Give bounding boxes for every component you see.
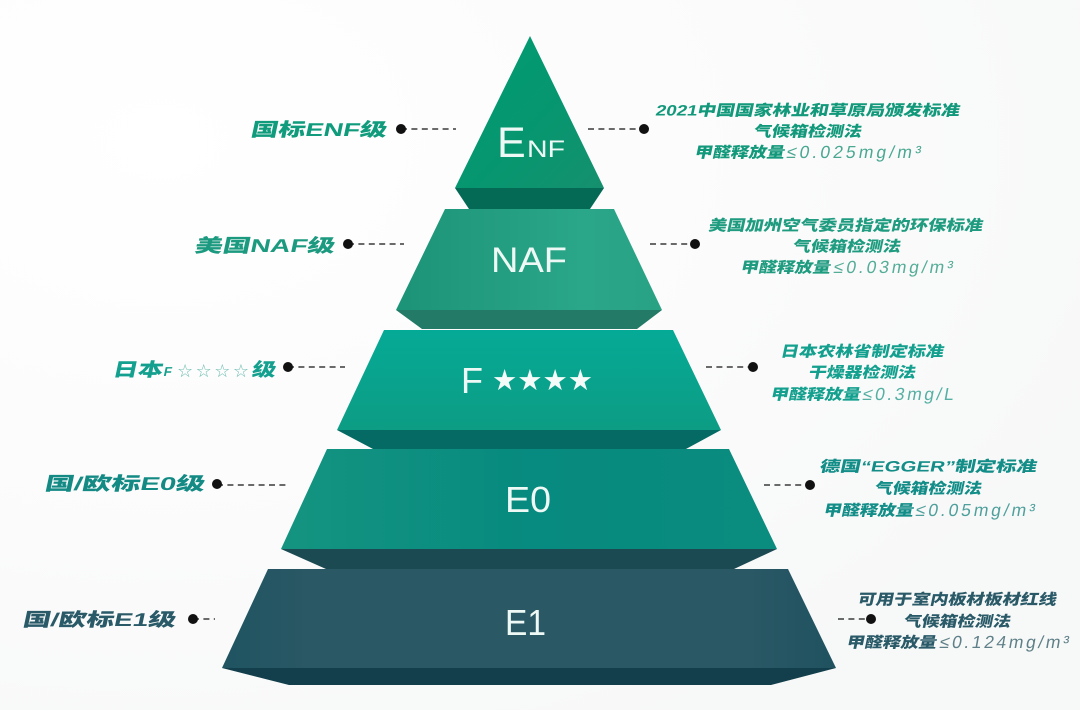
callout: ENF standard [588, 102, 962, 162]
callout: F four star standard: 日本农林省制定标准 [779, 343, 946, 360]
left label: E1 [21, 609, 215, 630]
callout: NAF standard: 气候箱检测法 [791, 238, 903, 255]
callout: NAF standard: ≤0.03mg/m³ [832, 257, 955, 277]
callout: F four star standard: 干燥器检测法 [807, 364, 918, 381]
left label: F four star: 级 [250, 359, 279, 380]
left label: E0: 国/欧标E0级 [43, 473, 208, 494]
tier: ENF [455, 36, 604, 209]
callout: E0 standard [764, 458, 1039, 520]
tier: ENF: NF [527, 136, 565, 163]
left label: ENF [249, 119, 456, 140]
left label: F four star: F [162, 364, 173, 379]
callout: NAF standard: 美国加州空气委员指定的环保标准 [707, 217, 985, 234]
callout: E0 standard: 气候箱检测法 [873, 480, 984, 497]
callout: E1 standard: ≤0.124mg/m³ [938, 632, 1071, 652]
tier: E1 [222, 569, 836, 685]
left label: F four star: ☆☆☆☆ [177, 361, 249, 382]
callout: NAF standard [650, 217, 985, 277]
left label: NAF [193, 235, 404, 256]
callout: E0 standard: ≤0.05mg/m³ [914, 500, 1037, 520]
callout: ENF standard: 气候箱检测法 [752, 123, 864, 140]
tier: F four star: F [461, 360, 483, 401]
callout: F four star standard: ≤0.3mg/L [861, 384, 956, 404]
pyramid [222, 36, 836, 685]
tier: E1: E1 [505, 602, 546, 643]
callout: E1 standard: 甲醛释放量 [845, 634, 939, 651]
tier: NAF [396, 209, 662, 329]
callout: E1 standard: 可用于室内板材板材红线 [856, 591, 1059, 608]
callout: ENF standard: ≤0.025mg/m³ [785, 142, 923, 162]
callout: E0 standard: 甲醛释放量 [822, 502, 916, 519]
tier: F four star [337, 330, 721, 449]
left label: E1: 国/欧标E1级 [21, 609, 179, 630]
tier: NAF: NAF [491, 241, 567, 280]
left label: NAF: 美国NAF级 [193, 235, 338, 256]
left label: F four star: 日本 [111, 359, 166, 380]
callout: NAF standard: 甲醛释放量 [739, 259, 833, 276]
tier: E0: E0 [505, 479, 551, 520]
callout: E1 standard [838, 591, 1071, 652]
callout: E1 standard: 气候箱检测法 [902, 613, 1013, 630]
tier: E0 [281, 449, 777, 569]
callout: ENF standard: 2021中国国家林业和草原局颁发标准 [654, 102, 962, 119]
left label: F four star [111, 359, 345, 382]
tier: ENF: E [497, 119, 526, 167]
callout: ENF standard: 甲醛释放量 [693, 144, 787, 161]
left label: ENF: 国标ENF级 [249, 119, 390, 140]
callout: E0 standard: 德国“EGGER”制定标准 [818, 458, 1039, 475]
left label: E0 [43, 473, 286, 494]
tier: F four star: ★★★★ [492, 363, 593, 397]
callout: F four star standard [706, 343, 956, 404]
callout: F four star standard: 甲醛释放量 [769, 386, 863, 403]
